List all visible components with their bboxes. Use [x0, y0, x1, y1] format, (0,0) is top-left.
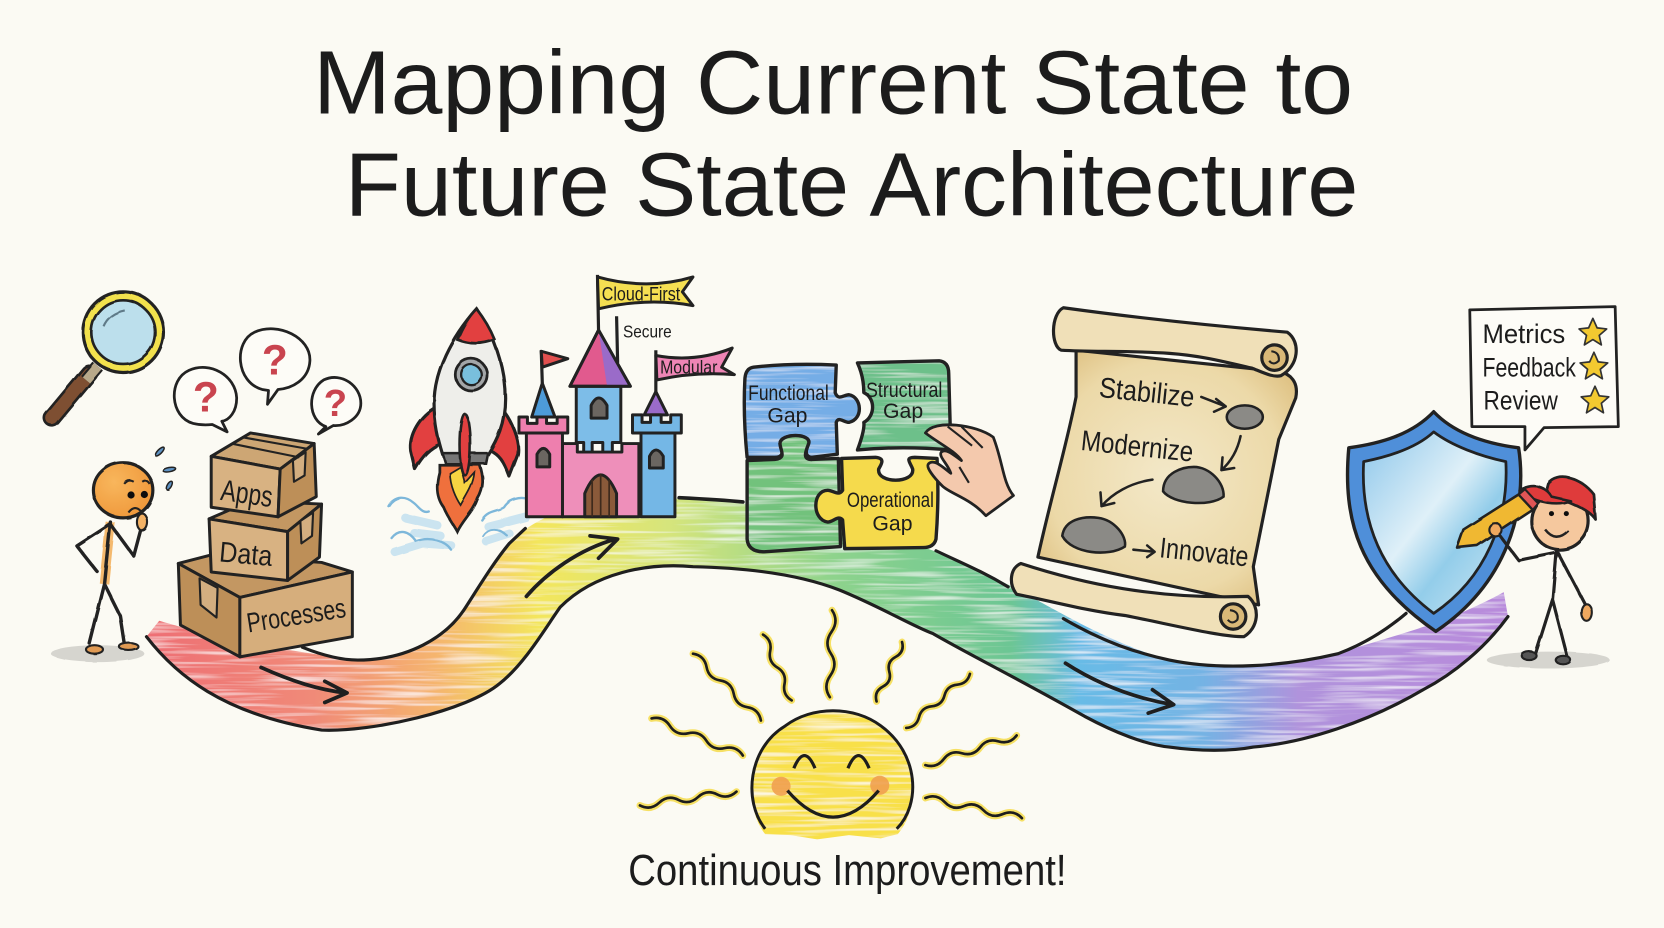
puzzle: blank green piece [747, 436, 840, 552]
stick figure with red cap and pencil [1457, 477, 1610, 669]
puzzle pieces and hand: Gap [883, 400, 923, 423]
title [313, 33, 1358, 235]
stacked boxes: Apps, Data, Processes: Processes [244, 592, 348, 638]
parchment scroll roadmap [1011, 308, 1296, 637]
continuous improvement caption: Continuous Improvement! [628, 847, 1067, 895]
rocket with clouds [388, 309, 527, 552]
metrics speech box: Review [1484, 386, 1559, 416]
question speech bubbles: ? [193, 374, 219, 421]
castle with flags [519, 275, 734, 517]
question speech bubbles: ? [262, 337, 288, 384]
box: Data [209, 501, 322, 580]
rainbow path [146, 498, 1508, 750]
metrics speech box [1470, 307, 1618, 450]
stacked boxes: Apps, Data, Processes [178, 433, 352, 657]
sun face [752, 711, 913, 839]
metrics speech box: Metrics [1483, 319, 1565, 349]
main wall [562, 444, 639, 517]
smiling sun [640, 610, 1022, 839]
puzzle pieces and hand: Gap [872, 513, 913, 536]
worried stick figure [51, 446, 176, 662]
magnifying glass icon [52, 292, 163, 418]
clouds [388, 498, 527, 552]
castle with flags: Cloud-First [602, 284, 681, 305]
flags [597, 277, 693, 309]
center tower [576, 386, 621, 452]
flame [437, 465, 483, 532]
box: Apps [211, 433, 316, 517]
title: Mapping Current State to [313, 33, 1353, 134]
stacked boxes: Apps, Data, Processes: Data [218, 536, 274, 573]
flag poles [541, 275, 656, 392]
puzzle pieces and hand [744, 361, 1013, 552]
metrics speech box: Feedback [1483, 353, 1576, 383]
sun rays [640, 610, 1022, 818]
rocket body [434, 309, 505, 454]
left tower [532, 383, 555, 417]
puzzle pieces and hand: Structural [866, 379, 942, 402]
hand [925, 425, 1013, 516]
castle with flags: Secure [623, 321, 672, 341]
puzzle: operational gap [816, 457, 938, 549]
scroll arrows [1100, 397, 1241, 557]
right tower [644, 392, 668, 415]
rating stars [1579, 318, 1609, 413]
puzzle: structural gap [857, 361, 951, 450]
puzzle pieces and hand: Gap [767, 404, 807, 427]
security shield [1348, 412, 1521, 631]
castle with flags: Modular [660, 358, 717, 378]
box: Processes [178, 555, 352, 657]
puzzle pieces and hand: Functional [748, 382, 829, 405]
figure shadow [51, 645, 144, 662]
red cap [1545, 477, 1596, 520]
question speech bubbles [174, 329, 361, 434]
stacked boxes: Apps, Data, Processes: Apps [219, 474, 275, 514]
title: Future State Architecture [345, 134, 1358, 235]
scroll body [1038, 350, 1296, 605]
scroll bottom roll [1011, 563, 1256, 637]
figure shadow [1487, 652, 1610, 669]
puzzle: functional gap [744, 364, 859, 457]
fins [410, 406, 441, 469]
parchment scroll roadmap: Innovate [1158, 532, 1250, 573]
river arrows [261, 536, 1174, 713]
parchment scroll roadmap: Stabilize [1098, 372, 1196, 414]
puzzle pieces and hand: Operational [847, 489, 934, 512]
parchment scroll roadmap: Modernize [1080, 425, 1195, 469]
scroll top roll [1054, 308, 1296, 376]
door [585, 475, 617, 517]
sweat drops [155, 446, 176, 491]
stepping stones [1062, 405, 1263, 553]
pencil [1457, 495, 1532, 548]
question speech bubbles: ? [324, 382, 347, 425]
